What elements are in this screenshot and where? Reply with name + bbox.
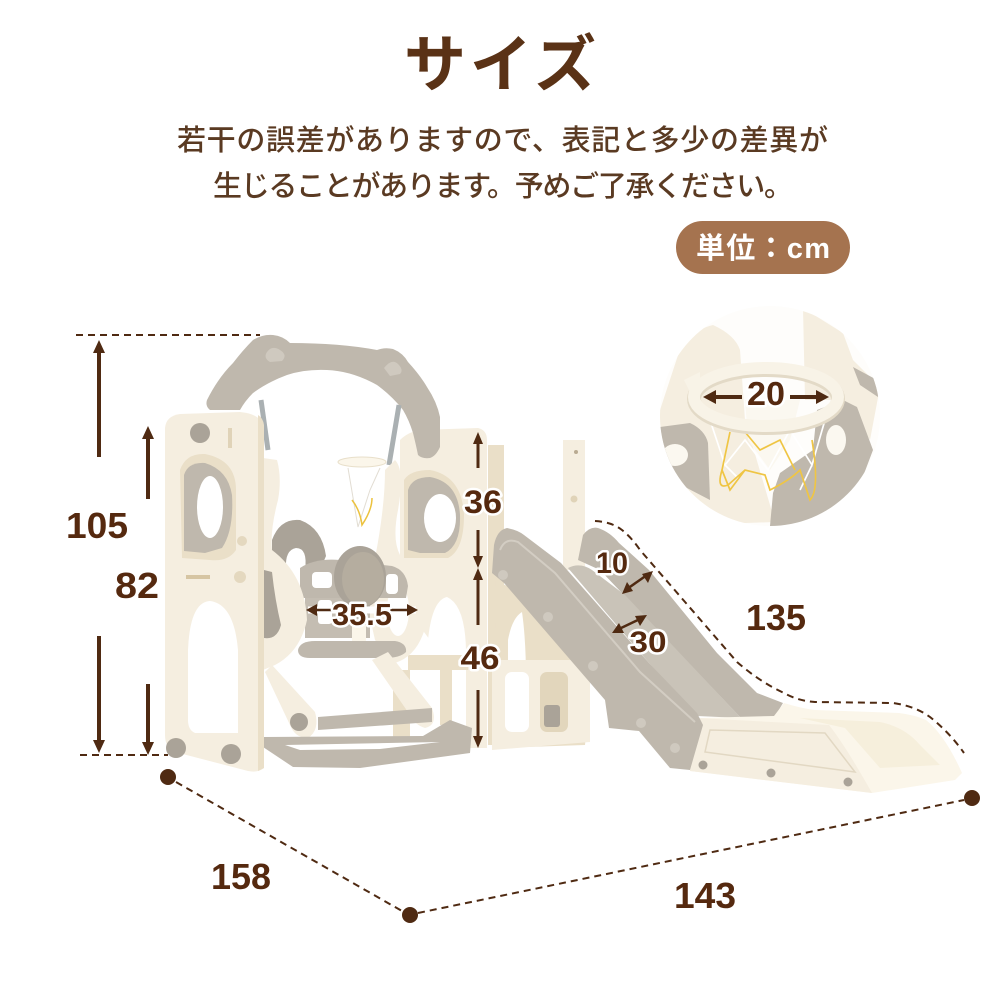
height dimension 105 bbox=[66, 335, 260, 755]
title: サイズ bbox=[404, 31, 596, 100]
inset center pole bbox=[745, 400, 800, 470]
tower dimension 36: 36 bbox=[464, 484, 502, 520]
swing seat bbox=[272, 520, 408, 658]
width dimension 143: 143 bbox=[674, 875, 736, 916]
unit badge: 単位：cm bbox=[696, 232, 830, 265]
slide front rail bbox=[492, 528, 703, 770]
slide length 135: 135 bbox=[746, 597, 806, 638]
slide rail width 10: 10 bbox=[596, 547, 628, 580]
inset grey strip bbox=[853, 367, 878, 397]
tower dimension 36 bbox=[464, 432, 502, 568]
swing legs and footrest bbox=[263, 652, 472, 768]
front left tower bbox=[165, 412, 264, 772]
right tower bbox=[393, 428, 585, 748]
slide bed width 30 bbox=[612, 615, 666, 659]
swing set product illustration bbox=[165, 335, 962, 793]
hoop diameter 20 bbox=[703, 375, 829, 412]
hoop diameter 20: 20 bbox=[747, 375, 785, 412]
subtitle text bbox=[177, 124, 828, 203]
rear swing side frame bbox=[366, 460, 427, 663]
left swing side frame bbox=[263, 458, 307, 670]
slide bed width 30: 30 bbox=[630, 626, 666, 659]
basketball hoop behind swing bbox=[338, 457, 386, 527]
seat width 35.5: 35.5 bbox=[332, 597, 392, 632]
inset right post bbox=[803, 308, 880, 440]
inset hoop ring bbox=[694, 370, 838, 428]
height dimension 105: 105 bbox=[66, 505, 128, 546]
inset grey right panel bbox=[770, 400, 873, 526]
slide rail width 10 bbox=[596, 547, 653, 594]
depth dimension 158: 158 bbox=[211, 856, 271, 897]
inset grey left panel bbox=[660, 423, 710, 500]
unit badge bbox=[676, 221, 850, 274]
slide rear rail bbox=[578, 528, 783, 718]
tower dimension 46: 46 bbox=[460, 640, 500, 676]
inset: basketball hoop detail bbox=[660, 306, 880, 526]
subtitle text: 生じることがあります。予めご了承ください。 bbox=[213, 170, 793, 203]
inset left post bbox=[660, 325, 775, 526]
swing chains bbox=[261, 400, 399, 465]
climber panel behind slide bbox=[492, 580, 590, 750]
seat width 35.5 bbox=[306, 597, 418, 632]
height dimension 82 bbox=[115, 426, 159, 755]
slide length 135 bbox=[595, 521, 964, 753]
height dimension 82: 82 bbox=[115, 565, 159, 606]
tower dimension 46 bbox=[460, 568, 500, 748]
arch bbox=[206, 335, 440, 458]
subtitle text: 若干の誤差がありますので、表記と多少の差異が bbox=[177, 124, 828, 157]
width dimension 143 bbox=[418, 790, 980, 916]
depth dimension 158 bbox=[160, 769, 418, 923]
inset net bbox=[710, 420, 825, 500]
slide runout bbox=[690, 703, 962, 793]
slide bed bbox=[568, 565, 741, 718]
